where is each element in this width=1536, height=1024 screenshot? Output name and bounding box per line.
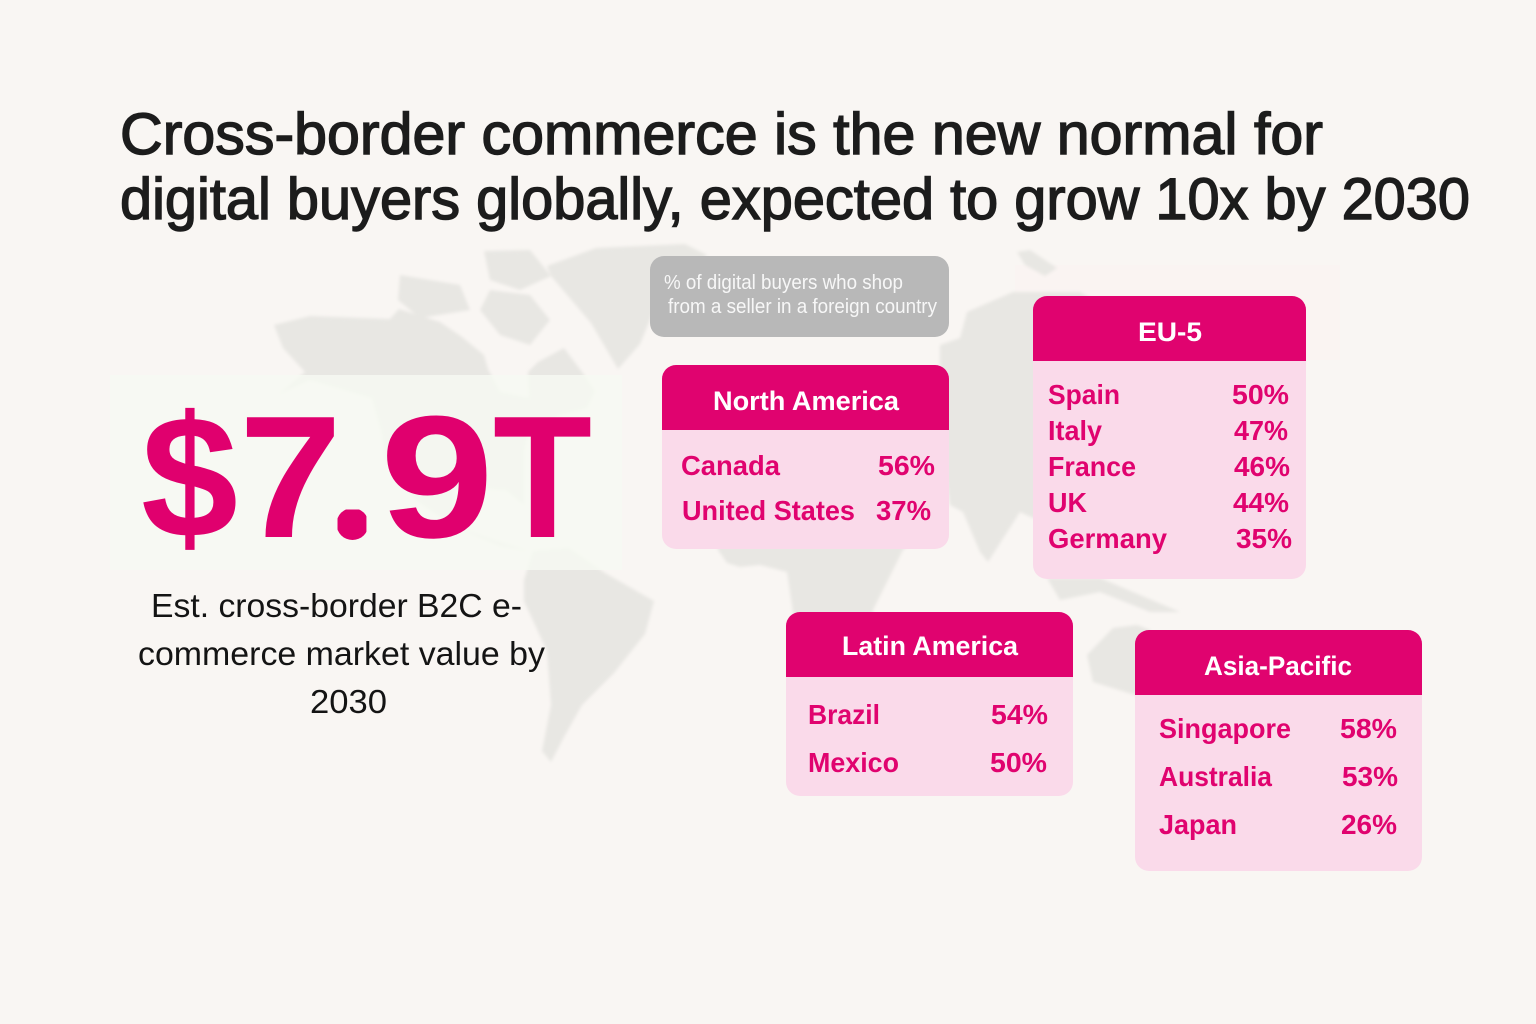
panel: Latin America: 54% [991,699,1048,730]
title [120,102,1470,232]
title: Cross-border commerce is the new normal for [120,102,1323,167]
world map background [274,244,1180,762]
panel: North America: North America [713,386,900,416]
panel: Asia-Pacific: Japan [1159,809,1237,840]
panel: EU-5: 47% [1234,415,1288,446]
panel: Asia-Pacific: 26% [1341,809,1397,840]
panel: Latin America: 50% [990,747,1047,778]
panel: EU-5: 50% [1232,379,1289,410]
market value caption: Est. cross-border B2C e- [151,587,522,624]
panel: Asia-Pacific: 58% [1340,713,1397,744]
big number: 9 [380,379,494,574]
big number [143,408,590,550]
panel: Asia-Pacific: 53% [1342,761,1398,792]
panel: EU-5: France [1048,451,1136,482]
panel: Latin America: Brazil [808,699,880,730]
panel: EU-5: EU-5 [1138,317,1202,347]
panel: EU-5: 44% [1233,487,1289,518]
note: % of digital buyers: from a seller in a foreign country [668,296,937,318]
panel: North America: United States [682,495,855,526]
panel: EU-5 [1033,296,1306,579]
market value caption: commerce market value by [138,635,546,672]
big number: T [493,379,592,574]
panel: North America: 56% [878,450,935,481]
panel: EU-5: 35% [1236,523,1292,554]
panel: North America [662,365,949,549]
panel: North America: Canada [681,450,780,481]
title: digital buyers globally, expected to grow 10x by 2030 [120,167,1470,232]
big number: . [324,355,381,584]
big number: 7 [239,379,342,574]
panel: EU-5: Italy [1048,415,1102,446]
big number: $ [141,379,238,574]
panel: Latin America: Latin America [842,631,1019,661]
panel: EU-5: UK [1048,487,1087,518]
highlight panel behind big number [110,375,622,570]
market value caption: 2030 [310,683,387,720]
note: % of digital buyers [650,256,949,337]
panel: EU-5: Spain [1048,379,1120,410]
panel: EU-5: Germany [1048,523,1167,554]
panel: Asia-Pacific: Singapore [1159,713,1291,744]
panel: Latin America [786,612,1073,796]
panel: Asia-Pacific [1135,630,1422,871]
market value caption [138,587,546,720]
panel: North America: 37% [876,495,931,526]
panel: Asia-Pacific: Australia [1159,761,1272,792]
panel: EU-5: 46% [1234,451,1290,482]
panel: Asia-Pacific: Asia-Pacific [1204,651,1352,681]
note: % of digital buyers: % of digital buyers who shop [664,272,903,294]
panel: Latin America: Mexico [808,747,899,778]
